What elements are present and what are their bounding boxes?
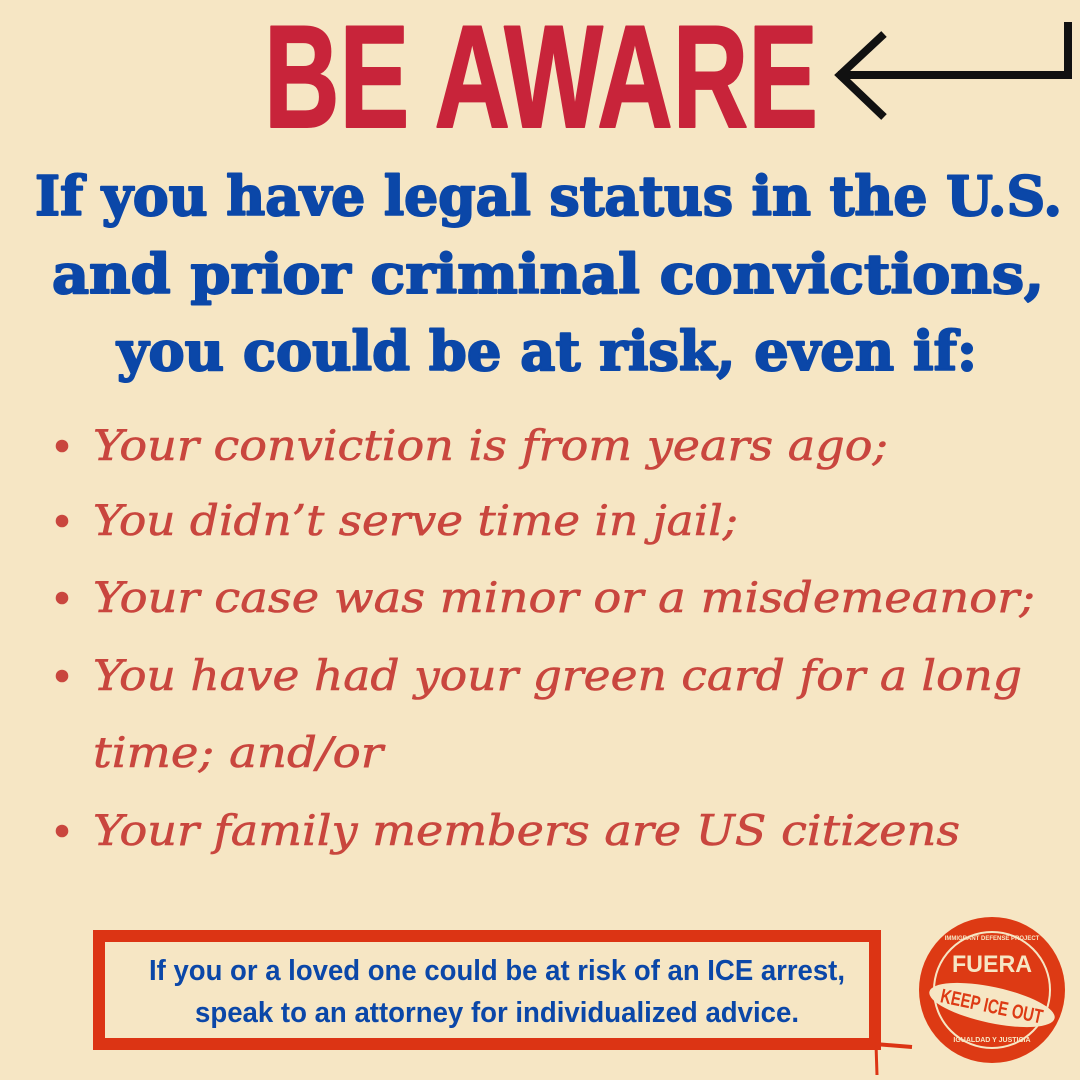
logo: IMMIGRANT DEFENSE PROJECT bbox=[945, 936, 1040, 942]
bullet list: You have had your green card for a long bbox=[93, 651, 1022, 700]
bullet list: You didn’t serve time in jail; bbox=[93, 496, 738, 545]
subtitle: you could be at risk, even if: bbox=[116, 319, 977, 383]
subtitle: If you have legal status in the U.S. bbox=[35, 164, 1062, 228]
logo: IGUALDAD Y JUSTICIA bbox=[953, 1037, 1031, 1044]
arrow bbox=[838, 22, 1068, 117]
bullet list: time; and/or bbox=[93, 728, 386, 777]
logo bbox=[919, 917, 1065, 1063]
bullet list: Your family members are US citizens bbox=[93, 806, 960, 855]
bullet list: Your conviction is from years ago; bbox=[93, 421, 888, 470]
subtitle: and prior criminal convictions, bbox=[52, 242, 1044, 306]
logo: KEEP ICE OUT bbox=[938, 985, 1045, 1029]
callout box: speak to an attorney for individualized advice. bbox=[195, 997, 799, 1029]
callout box bbox=[99, 936, 912, 1075]
bullet list: Your case was minor or a misdemeanor; bbox=[93, 573, 1035, 622]
bullet list bbox=[56, 421, 1035, 855]
logo: FUERA bbox=[952, 951, 1032, 978]
callout box: If you or a loved one could be at risk of an ICE arrest, bbox=[149, 955, 845, 987]
subtitle bbox=[35, 164, 1062, 383]
